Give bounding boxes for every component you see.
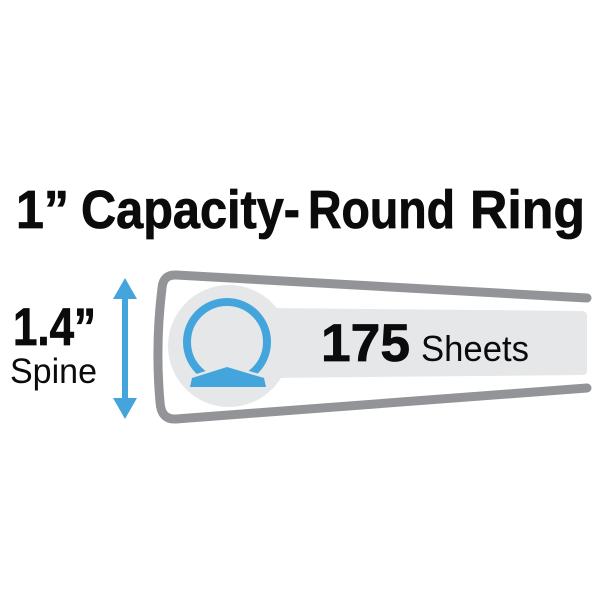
capacity panel: [168, 285, 587, 407]
panel background circle: [168, 285, 290, 407]
title: round: Round: [308, 180, 455, 240]
spine measurement label: [10, 298, 97, 391]
arrow: spine height: [113, 278, 137, 419]
spine caption: Spine: [10, 352, 97, 391]
ring base: [190, 367, 266, 387]
spine value: 1.4”: [13, 298, 96, 357]
title: capacity: Capacity-: [81, 180, 300, 240]
icon: round ring: [187, 302, 267, 387]
ring: [187, 302, 267, 382]
sheets label: Sheets: [421, 328, 529, 369]
title: [16, 180, 585, 240]
sheet count: 175: [321, 314, 410, 373]
title: ring: Ring: [470, 180, 585, 240]
binder outline: [158, 275, 587, 419]
title: size: 1”: [16, 180, 69, 240]
panel background bar: [270, 308, 587, 378]
